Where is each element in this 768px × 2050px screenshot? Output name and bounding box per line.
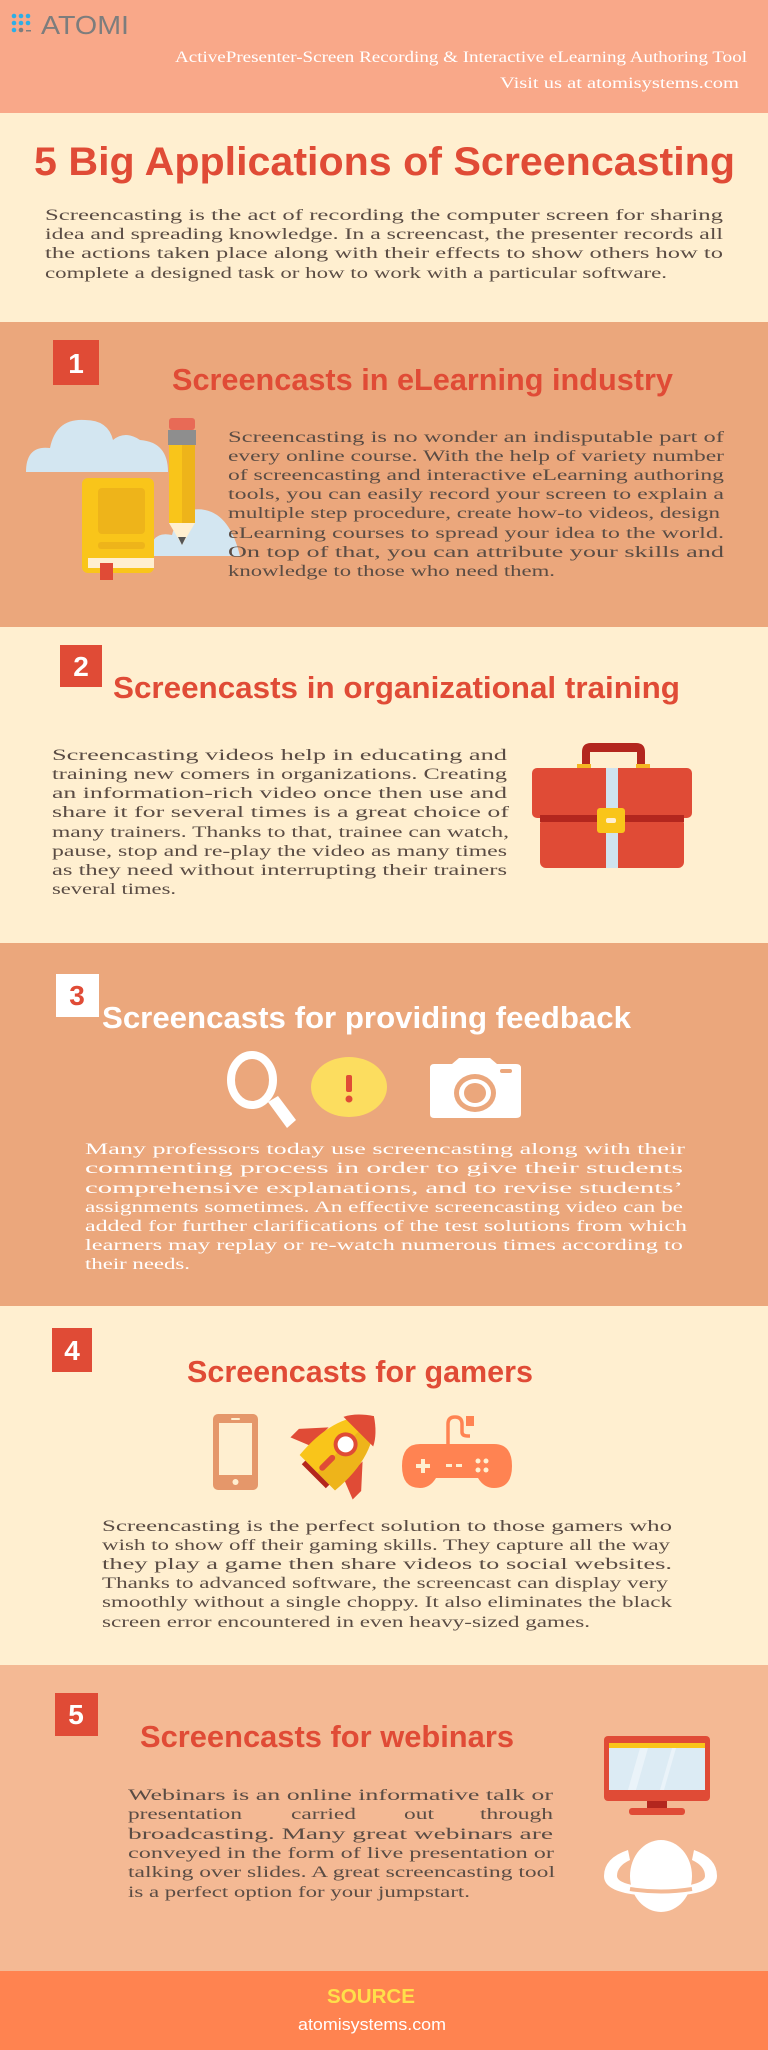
source url: atomisystems.com [298, 2015, 446, 2034]
logo: ATOMI: ATOMI [41, 10, 129, 40]
source label: SOURCE [327, 1986, 415, 2008]
text 1: every online course. With the help of variety number [228, 448, 725, 465]
text 2: pause, stop and re-play the video as many times [52, 843, 507, 860]
text 5: conveyed in the form of live presentation or [128, 1845, 555, 1862]
number badge 4: 4 [64, 1335, 80, 1366]
text 4: they play a game then share videos to social websites. [102, 1556, 672, 1573]
text 5: presentation [128, 1806, 242, 1823]
text 2: several times. [52, 881, 176, 898]
text 5: carried [291, 1806, 356, 1823]
text 3: assignments sometimes. An effective screencasting video can be [85, 1199, 683, 1216]
header band [0, 0, 768, 113]
text 4: wish to show off their gaming skills. They capture all the way [102, 1537, 670, 1554]
text 2: share it for several times is a great choice of [52, 804, 510, 821]
panel: section 3 feedback [0, 943, 768, 1306]
icon: camera [430, 1058, 521, 1118]
icon: clouds, book and pencil [26, 418, 240, 580]
text 5: broadcasting. Many great webinars are [128, 1826, 553, 1843]
text 3 [85, 1141, 687, 1273]
panel: section 4 gamers [0, 1306, 768, 1665]
text 2: training new comers in organizations. Creating [52, 766, 507, 783]
text 3: commenting process in order to give their students [85, 1160, 683, 1177]
icon: planet [604, 1840, 717, 1912]
text 1: On top of that, you can attribute your skills and [228, 544, 724, 561]
text 5: talking over slides. A great screencasting tool [128, 1864, 555, 1881]
number badge 5 [55, 1693, 98, 1736]
text 4 [102, 1518, 672, 1631]
intro text: the actions taken place along with their effects to show others how to [45, 245, 723, 262]
number badge 2 [60, 645, 102, 687]
text 2: Screencasting videos help in educating and [52, 747, 507, 764]
main title: 5 Big Applications of Screencasting [34, 140, 735, 184]
heading 5: Screencasts for webinars [140, 1719, 514, 1754]
icon: magnifier [231, 1055, 296, 1128]
logo: ATOMI [12, 10, 129, 40]
heading 2: Screencasts in organizational training [113, 670, 680, 705]
intro text: Screencasting is the act of recording the computer screen for sharing [45, 207, 723, 224]
text 5: through [480, 1806, 553, 1823]
text 2 [52, 747, 510, 898]
panel: section 1 eLearning [0, 322, 768, 628]
text 5: out [404, 1806, 435, 1823]
text 2: an information-rich video once then use and [52, 785, 507, 802]
icon: monitor [604, 1736, 710, 1815]
text 1: eLearning courses to spread your idea to the world. [228, 525, 724, 542]
text 4: Thanks to advanced software, the screencast can display very [102, 1575, 668, 1592]
text 3: comprehensive explanations, and to revise students’ [85, 1180, 683, 1197]
intro text: complete a designed task or how to work with a particular software. [45, 265, 667, 282]
panel: section 2 organizational training [0, 627, 768, 943]
icon: gamepad [402, 1416, 512, 1488]
visit line: Visit us at atomisystems.com [500, 75, 740, 92]
number badge 5: 5 [68, 1699, 84, 1730]
text 3: added for further clarifications of the test solutions from which [85, 1218, 687, 1235]
text 4: Screencasting is the perfect solution to those gamers who [102, 1518, 672, 1535]
text 4: smoothly without a single choppy. It also eliminates the black [102, 1594, 672, 1611]
intro text [45, 207, 723, 282]
number badge 1 [53, 340, 99, 385]
text 3: Many professors today use screencasting along with their [85, 1141, 686, 1158]
text 5: is a perfect option for your jumpstart. [128, 1884, 470, 1901]
text 1: of screencasting and interactive eLearning authoring [228, 467, 724, 484]
number badge 3 [56, 974, 99, 1017]
icon: phone [213, 1414, 258, 1490]
number badge 4 [52, 1328, 92, 1372]
number badge 1: 1 [68, 348, 84, 379]
heading 1: Screencasts in eLearning industry [172, 362, 674, 397]
number badge 3: 3 [69, 980, 85, 1011]
text 4: screen error encountered in even heavy-sized games. [102, 1614, 590, 1631]
icon: alert circle [311, 1057, 387, 1117]
text 2: many trainers. Thanks to that, trainee can watch, [52, 824, 509, 841]
heading 4: Screencasts for gamers [187, 1354, 533, 1389]
tagline: ActivePresenter-Screen Recording & Interactive eLearning Authoring Tool [175, 49, 748, 66]
text 1 [228, 429, 725, 580]
text 2: as they need without interrupting their trainers [52, 862, 507, 879]
footer: source [0, 1971, 768, 2050]
text 3: learners may replay or re-watch numerous times according to [85, 1237, 683, 1254]
text 1: multiple step procedure, create how-to videos, design [228, 505, 720, 522]
heading 3: Screencasts for providing feedback [102, 1000, 632, 1035]
text 1: Screencasting is no wonder an indisputable part of [228, 429, 725, 446]
text 5 [128, 1787, 555, 1901]
panel: section 5 webinars [0, 1665, 768, 1971]
icon: rocket [283, 1385, 405, 1507]
number badge 2: 2 [73, 651, 89, 682]
intro text: idea and spreading knowledge. In a screencast, the presenter records all [45, 226, 723, 243]
text 3: their needs. [85, 1256, 190, 1273]
text 5: Webinars is an online informative talk or [128, 1787, 554, 1804]
text 1: tools, you can easily record your screen to explain a [228, 486, 724, 503]
text 1: knowledge to those who need them. [228, 563, 555, 580]
intro panel [0, 113, 768, 322]
icon: briefcase [532, 743, 692, 868]
